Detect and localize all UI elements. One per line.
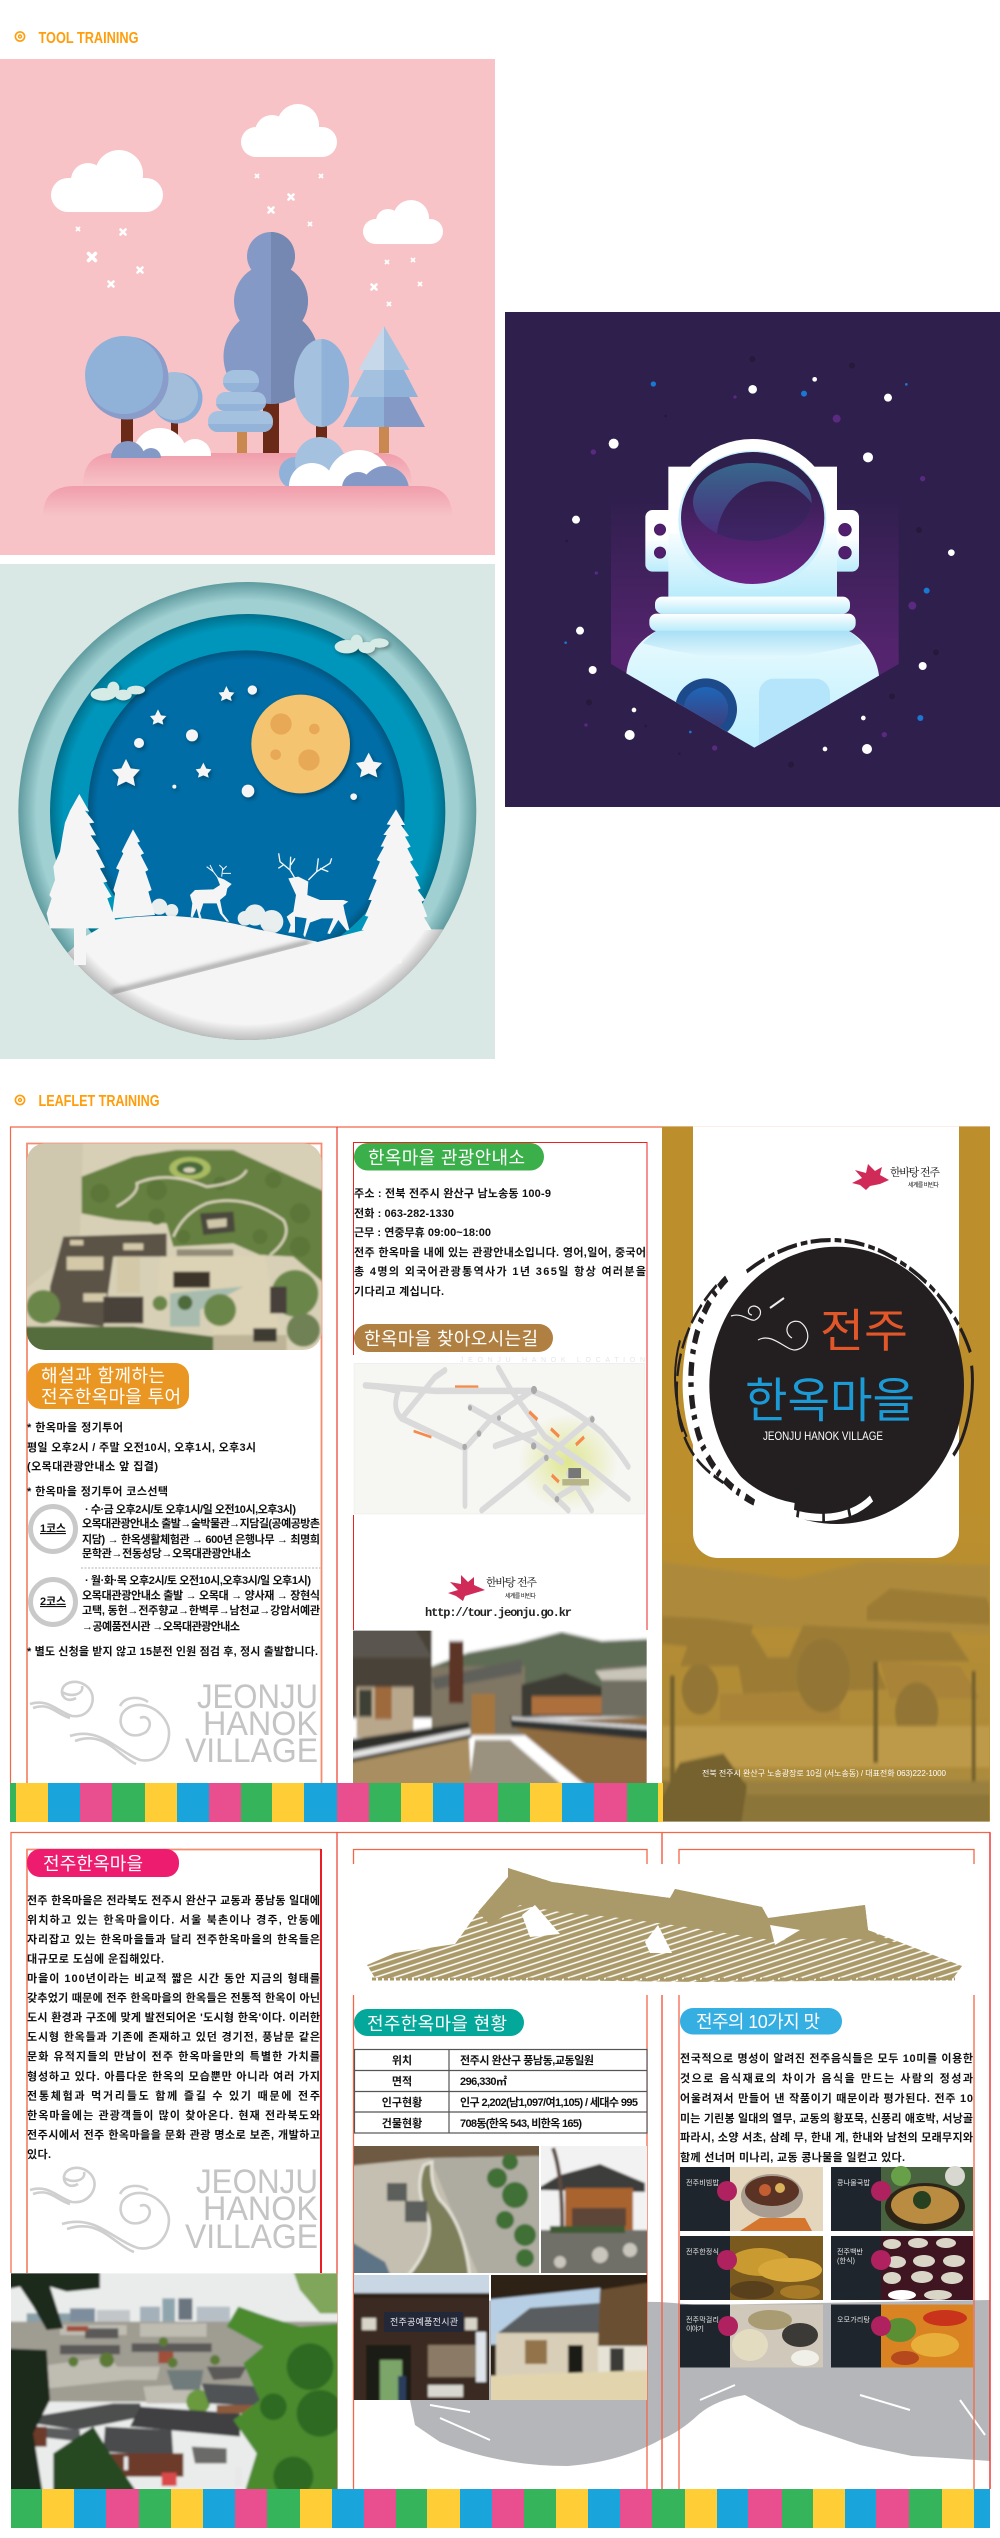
logo: slogan: 한바탕 전주: [486, 1574, 537, 1590]
panel: astronaut illustration: [505, 312, 1000, 807]
card: makgeolli: 이야기: [686, 2324, 704, 2333]
moon craters: [270, 713, 320, 771]
heading: leaflet training: [15, 1093, 160, 1110]
text: address: 전북 전주시 완산구 노송광장로 10길 (서노송동) / 대표전화 063)222-1000: [702, 1768, 947, 1778]
logo: swirl clouds: [30, 2168, 169, 2252]
card: hanjeongsik: [680, 2236, 823, 2300]
text: body: [27, 1893, 320, 2161]
pill: status heading: 전주한옥마을 현황: [367, 2014, 507, 2034]
icon: swirl clouds white: [731, 1298, 808, 1350]
logo: slogan: 세계를 비빈다: [505, 1592, 536, 1600]
logo: wordmark: [185, 2163, 318, 2256]
icon: flower: [852, 1164, 889, 1190]
faint map caption: JEONJU HANOK LOCATION: [460, 1357, 645, 1364]
pill: tour heading: 전주한옥마을 투어: [41, 1387, 181, 1407]
text: english name: JEONJU HANOK VILLAGE: [763, 1429, 883, 1443]
photo: tinted hanok roofs: [662, 1560, 990, 1822]
text: course 1: 오목대관광안내소 출발→술박물관→지담길(공예공방촌: [82, 1516, 320, 1530]
photo: pavilion: [541, 2146, 647, 2273]
pill: heading: [27, 1849, 179, 1877]
table: status: 인구 2,202(남1,097/여1,105) / 세대수 995: [460, 2095, 638, 2109]
logo: wordmark: JEONJU: [196, 2163, 318, 2201]
text: course 2: 고택, 동헌→전주향교→한벽루→남천교→강암서예관: [82, 1603, 320, 1617]
stars dark: [565, 356, 939, 768]
card: baekban: (한식): [837, 2256, 855, 2265]
card: makgeolli: 전주막걸리: [686, 2315, 719, 2324]
snow hills: [68, 916, 444, 1040]
card: omogari stew: [831, 2304, 973, 2368]
logo: wordmark: VILLAGE: [185, 1732, 318, 1770]
text: body: 도시형 한옥들과 기존에 존재하고 있던 경기전, 풍남문 같은: [27, 2030, 320, 2044]
text: tourist info: 기다리고 계십니다.: [354, 1284, 444, 1298]
text: course 2: →공예품전시관 →오목대관광안내소: [82, 1619, 240, 1633]
bushes left: [111, 428, 211, 458]
bushes: [151, 899, 283, 933]
panel: pink winter forest illustration: [0, 59, 495, 555]
text: regular tour: * 한옥마을 정기투어 코스선택: [27, 1484, 168, 1498]
ink circle logo: [675, 1240, 972, 1524]
text: body: 있다.: [27, 2147, 51, 2161]
text: flavours body: 어울려져서 만들어 낸 작품이기 때문이라 평가된다. 전주 10: [680, 2091, 973, 2105]
card: baekban: [831, 2236, 973, 2300]
icon: target bullet: [15, 32, 25, 41]
text: tourist info: 전주 한옥마을 내에 있는 관광안내소입니다. 영어,일어, 중국어: [354, 1245, 646, 1259]
text: flavours body: [680, 2051, 973, 2164]
ear holes: [654, 523, 851, 559]
tree: tall: [224, 232, 318, 453]
badge: course 2: 2코스: [40, 1595, 66, 1608]
title: Jeonju: 전주: [820, 1305, 908, 1357]
text: flavours body: 파라시, 소양 서초, 삼례 무, 한내 게, 한내와 남천의 모래무지와: [680, 2130, 973, 2144]
cloud right: [363, 200, 443, 244]
text: tourist info: 근무 : 연중무휴 09:00~18:00: [354, 1225, 491, 1239]
leaflet panel 1: tour: [20, 1137, 328, 1770]
text: note: * 별도 신청을 받지 않고 15분전 인원 점검 후, 정시 출발합니다.: [27, 1644, 318, 1658]
heading: tool training: [15, 30, 138, 47]
banner: [611, 497, 899, 748]
table: status: 건물현황: [382, 2116, 422, 2130]
text: course 2: 오목대관광안내소 출발 → 오목대 → 양사재 → 장현식: [82, 1588, 320, 1602]
deer small: [190, 865, 232, 922]
photo: stream: [354, 2146, 539, 2273]
logo: wordmark: VILLAGE: [185, 2218, 318, 2256]
logo: wordmark: HANOK: [203, 2190, 318, 2228]
leaflet row 2 guides: [11, 1832, 990, 2489]
card: bean sprout soup: 콩나물국밥: [837, 2178, 871, 2187]
white panel: [693, 1126, 959, 1558]
stars and dots: [112, 685, 382, 800]
leaflet panel 2: tourist info: [348, 1143, 652, 1790]
leaflet panel 3: cover: [657, 1126, 997, 1832]
text: tourist info: 총 4명의 외국어관광통역사가 1년 365일 항상 여러분을: [354, 1264, 646, 1278]
neck rings: [649, 597, 856, 631]
pill: tour heading: 해설과 함께하는: [41, 1366, 165, 1386]
badge: course 2: [30, 1580, 76, 1624]
card: bean sprout soup: [831, 2166, 973, 2231]
photo: aerial hanok map: [20, 1137, 328, 1357]
grey brush stroke: [410, 2300, 990, 2466]
logo: slogan: [448, 1574, 537, 1601]
moon: [251, 695, 350, 793]
pill: tourist info heading: 한옥마을 관광안내소: [368, 1148, 525, 1168]
text: body: 전주시에서 전주 한옥마을을 문화 관광 명소로 보존, 개발하고: [27, 2128, 320, 2142]
card: hanjeongsik: 전주한정식: [686, 2247, 719, 2256]
table: status: [354, 2049, 647, 2133]
text: course 1: [82, 1502, 320, 1560]
bushes right: [279, 437, 409, 486]
layered rings: [18, 582, 476, 1040]
photo: village panorama: [3, 2267, 343, 2497]
icon: flower: [448, 1575, 485, 1601]
tree: small round: [150, 372, 202, 440]
body: [626, 631, 879, 748]
logo: slogan: [852, 1164, 940, 1190]
clouds: [91, 635, 389, 701]
deer big: [278, 853, 349, 937]
text: flavours body: 전국적으로 명성이 알려진 전주음식들은 모두 10미를 이용한: [680, 2051, 973, 2065]
card: baekban: 전주백반: [837, 2247, 864, 2256]
text: regular tour: (오목대관광안내소 앞 집결): [27, 1459, 158, 1473]
panel: paper-cut winter night: [0, 564, 495, 1060]
dotted divider: [81, 1567, 322, 1569]
text: regular tour: * 한옥마을 정기투어: [27, 1420, 123, 1434]
text: regular tour: [27, 1420, 256, 1498]
leaflet row 1 guides: [10, 1127, 990, 1783]
text: flavours body: 것으로 음식재료의 차이가 음식을 만드는 사람의 정성과: [680, 2071, 973, 2085]
text: flavours body: 미는 기린봉 일대의 열무, 교동의 황포묵, 신풍리 애호박, 서낭골: [680, 2111, 973, 2125]
text: body: 대규모로 도심에 운집해있다.: [27, 1952, 164, 1966]
title: Hanok village: 한옥마을: [745, 1375, 915, 1428]
table: status: 296,330㎡: [460, 2075, 507, 2088]
text: course 1: 지담) → 한옥생활체험관 → 600년 은행나무 → 최명희: [82, 1532, 320, 1546]
text: body: 전주 한옥마을은 전라북도 전주시 완산구 교동과 풍남동 일대에: [27, 1893, 320, 1907]
card: makgeolli: [680, 2304, 823, 2368]
tree: pine: [343, 326, 425, 453]
pine left: [47, 794, 118, 965]
tree: oval: [294, 339, 349, 445]
cloud centre: [241, 104, 337, 157]
text: body: 갖추었기 때문에 전주 한옥마을의 한옥들은 전통적 한옥이 아닌: [27, 1990, 320, 2004]
heading: leaflet training: LEAFLET TRAINING: [38, 1093, 160, 1110]
photo: craft hall gate: [354, 2275, 489, 2400]
pine right: [362, 809, 432, 963]
heading: tool training: TOOL TRAINING: [38, 30, 138, 47]
badge: course 1: [30, 1506, 76, 1552]
text: course 1: · 수·금 오후2시/토 오후1시/일 오전10시,오후3시): [85, 1502, 296, 1516]
card: bibimbap: 전주비빔밥: [686, 2178, 720, 2187]
pill: flavours heading: [680, 2008, 842, 2034]
table: status: 708동(한옥 543, 비한옥 165): [460, 2116, 582, 2130]
pill: heading: 전주한옥마을: [43, 1854, 143, 1874]
pill: flavours heading: 전주의 10가지 맛: [696, 2012, 820, 2032]
cloud left: [51, 150, 163, 212]
pill: tour heading: [27, 1363, 189, 1409]
pill: tourist info heading: [354, 1143, 544, 1170]
logo: slogan: 세계를 비빈다: [908, 1181, 939, 1189]
logo: wordmark: HANOK: [203, 1705, 318, 1743]
pill: directions heading: 한옥마을 찾아오시는길: [364, 1329, 538, 1349]
leaflet panel 5: status: [348, 2009, 653, 2406]
neck: [668, 467, 837, 597]
tree: stacked: [208, 370, 273, 453]
map: [354, 1363, 645, 1514]
text: body: 마을이 100년이라는 비교적 짧은 시간 동안 지금의 형태를: [27, 1971, 320, 1985]
table: status: 면적: [392, 2075, 412, 2088]
text: body: 위치하고 있는 한옥마을이다. 서울 북촌이나 경주, 안동에: [27, 1912, 320, 1926]
photo: craft hall gate: 전주공예품전시관: [390, 2317, 458, 2327]
stars purple: [584, 395, 925, 751]
badge: course 1: 1코스: [40, 1522, 66, 1535]
logo: swirl clouds: [30, 1682, 169, 1764]
visor: [678, 451, 826, 599]
text: body: 문화 유적지들의 만남이 전주 한옥마을만의 특별한 가치를: [27, 2049, 320, 2063]
photo: hanok courtyard: [491, 2275, 647, 2400]
tree: large round: [85, 336, 168, 447]
text: course 2: [82, 1573, 320, 1633]
icon: target bullet: [15, 1095, 25, 1105]
logo: wordmark: [185, 1678, 318, 1770]
colour band row 1: [10, 1783, 663, 1822]
card: bibimbap: [680, 2167, 823, 2231]
roof illustration: [367, 1868, 962, 1982]
text: body: 한옥마을에는 관광객들이 많이 찾아온다. 현재 전라북도와: [27, 2108, 320, 2122]
pine middle: [112, 829, 155, 918]
body patches: [676, 678, 830, 745]
stars blue: [564, 381, 930, 733]
text: body: 자리잡고 있는 한옥마을들과 달리 전주한옥마을의 한옥들은: [27, 1932, 320, 1946]
logo: wordmark: JEONJU: [197, 1678, 318, 1716]
text: regular tour: 평일 오후2시 / 주말 오전10시, 오후1시, 오후3시: [27, 1440, 256, 1454]
table: status: 전주시 완산구 풍남동,교동일원: [460, 2053, 594, 2067]
snowflakes: [76, 174, 422, 306]
pill: directions heading: [354, 1324, 553, 1352]
leaflet panel 4: Jeonju hanok village: [3, 1849, 343, 2497]
text: tourist info: 전화 : 063-282-1330: [354, 1206, 454, 1220]
text: tourist info: [354, 1186, 646, 1298]
stars white: [572, 377, 955, 754]
text: body: 도시 환경과 구조에 맞게 발전되어온 '도시형 한옥'이다. 이러한: [27, 2010, 320, 2024]
cover background: [662, 1126, 990, 1822]
ground hills: [43, 453, 452, 516]
text: body: 형성하고 있다. 아름다운 한옥의 모습뿐만 아니라 여러 가지: [27, 2069, 320, 2083]
helmet: [668, 439, 836, 533]
text: body: 전통체험과 먹거리들도 함께 즐길 수 있기 때문에 전주: [27, 2088, 320, 2102]
helmet ears: [645, 510, 859, 572]
text: flavours body: 함께 선너머 미나리, 교동 콩나물을 일컫고 있다.: [680, 2150, 905, 2164]
pill: status heading: [354, 2009, 524, 2036]
logo: slogan: 한바탕 전주: [890, 1164, 940, 1180]
table: status: 인구현황: [382, 2095, 422, 2109]
photo: hanok street: [353, 1630, 647, 1783]
card: omogari stew: 오모가리탕: [837, 2315, 871, 2324]
text: tourist info: 주소 : 전북 전주시 완산구 남노송동 100-9: [354, 1186, 551, 1200]
text: course 2: · 월·화·목 오후2시/토 오전10시,오후3시/일 오후1시): [85, 1573, 311, 1587]
colour band row 2: [11, 2489, 990, 2528]
text: course 1: 문학관→전동성당→오목대관광안내소: [82, 1546, 251, 1560]
text: website: http://tour.jeonju.go.kr: [425, 1606, 572, 1620]
table: status: 위치: [392, 2054, 412, 2067]
leaflet panel 6: ten flavours: [680, 2008, 973, 2368]
